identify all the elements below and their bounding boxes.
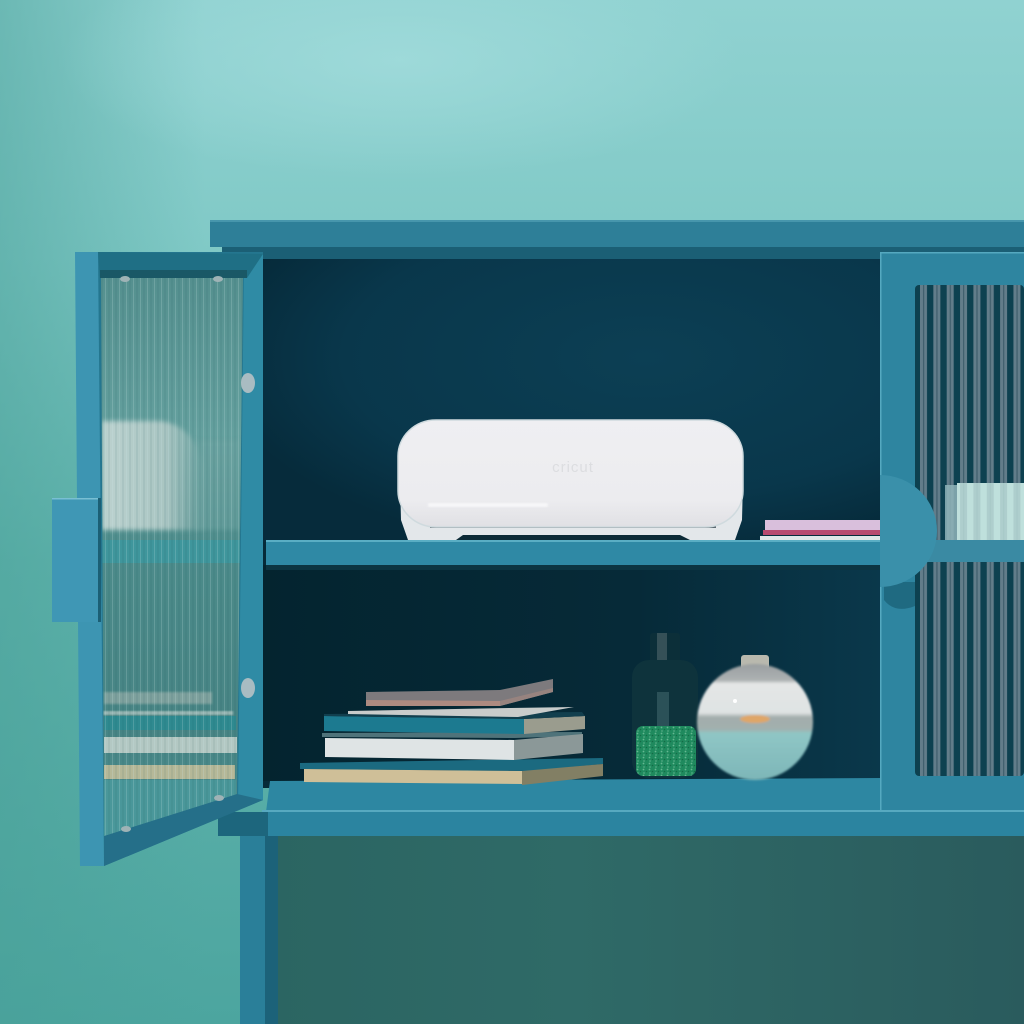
cutting machine [398,420,743,540]
machine seen through glass [957,483,1024,540]
hinge top [241,373,255,393]
machine slot [456,535,690,540]
machine reflection [102,421,208,530]
left open door [52,252,263,866]
cabinet leg [240,836,278,1024]
outer frame side [75,252,104,866]
teal book [324,712,585,734]
ribbed door glass [100,278,250,840]
machine lid [398,420,743,527]
book reflections [104,692,212,704]
half round handle [880,475,937,587]
door inner frame [98,252,263,866]
shelf seen through glass [928,540,1024,562]
brand name: cricut [552,459,594,476]
ribbed glass [915,285,1024,776]
small pink books [760,520,880,540]
middle shelf [266,540,882,570]
thin pale book [348,707,574,717]
right door [880,252,1024,810]
stack of books [300,679,603,785]
lower back panel [262,565,882,781]
bottom book [300,758,603,785]
shelf reflection [102,540,242,563]
ceramic vase [697,655,813,780]
lid highlight [428,503,548,507]
bottom inner frame [104,794,263,866]
handle shadow [884,582,915,609]
top magazine [366,679,553,706]
door handle [52,498,101,622]
glass bottle [632,633,698,778]
glass ribs [100,278,250,838]
area beneath cabinet [270,836,1024,1024]
top inner frame [98,252,263,278]
bottom shelf and base [218,778,1024,836]
hinge bottom [241,678,255,698]
glass clips [120,276,224,832]
machine base [400,480,743,540]
machine seam [430,526,716,528]
upper back panel [262,258,882,542]
cabinet interior [262,258,882,788]
white book [322,732,583,760]
cabinet top [210,220,1024,259]
